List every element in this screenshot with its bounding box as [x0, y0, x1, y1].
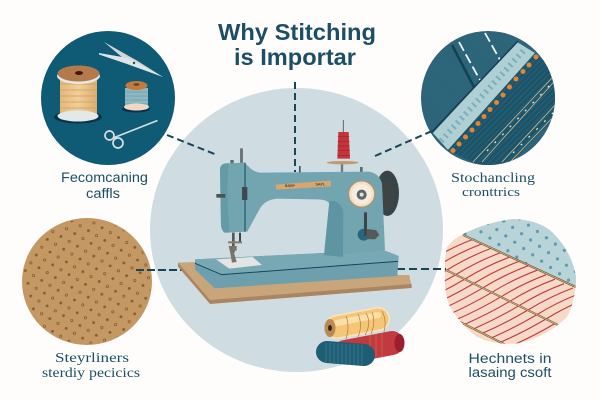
label: denim: Stochancling: [451, 170, 535, 185]
head seam: [243, 163, 246, 232]
white dashed stitches: [459, 33, 500, 80]
red stitch stripes: [444, 238, 574, 344]
panel: denim stitching circle: [421, 31, 555, 165]
sewing machine: [178, 120, 412, 304]
label: tools: [61, 170, 148, 201]
needle plate: [216, 257, 262, 269]
brand plate: BSEP: [285, 184, 296, 188]
dark seam: [452, 45, 474, 87]
brand plate: SAPL: [315, 183, 326, 187]
dashed connector lines: [136, 82, 446, 270]
orange stitches: [450, 54, 538, 153]
title: is Importar: [234, 44, 356, 70]
ribbed dark band: [448, 53, 555, 165]
light band: [433, 42, 535, 150]
body arm: [220, 163, 385, 257]
wooden base: [178, 262, 412, 304]
red spool: [345, 333, 404, 359]
head left shade: [220, 163, 229, 233]
label: denim: [451, 170, 535, 199]
brand plate: [276, 181, 331, 190]
knobs: [242, 187, 247, 200]
label: tan: [42, 350, 140, 380]
teal spool: [326, 343, 364, 365]
column shadow: [324, 201, 343, 257]
title: [218, 19, 376, 70]
background circle: [150, 88, 443, 372]
icon: embroidery scissors: [105, 120, 158, 148]
label: tools: Fecomcaning: [61, 170, 148, 185]
top pins: [360, 167, 363, 173]
icon: large thread spool: [54, 66, 102, 124]
title: Why Stitching: [218, 19, 376, 45]
panel: tan perforated circle: [22, 218, 152, 345]
spool pin red thread: [342, 120, 345, 132]
icon: small thread spool: [122, 81, 150, 112]
panel: tools circle: [41, 31, 175, 165]
teal dotted fabric: [462, 219, 576, 286]
dial: [349, 181, 375, 207]
tan seams: [446, 235, 580, 345]
panel: striped fabric: [444, 219, 576, 344]
thread spools group: [324, 311, 404, 365]
yellow spool: [324, 311, 385, 339]
needle assembly: [228, 233, 242, 263]
label: tan: sterdiy pecicics: [42, 365, 140, 380]
handwheel: [376, 171, 399, 216]
dark shadow: [430, 41, 518, 134]
label: tools: caffls: [86, 186, 120, 201]
label: striped fabric: [468, 351, 552, 380]
lever: [358, 212, 379, 241]
icon: shears: [99, 42, 163, 77]
machine bed: [195, 250, 399, 288]
label: tan: Steyrliners: [55, 350, 129, 365]
tan seam lines: [473, 78, 560, 162]
label: striped fabric: Hechnets in: [468, 351, 552, 366]
label: striped fabric: lasaing csoft: [468, 365, 552, 380]
label: denim: cronttrics: [462, 185, 520, 199]
